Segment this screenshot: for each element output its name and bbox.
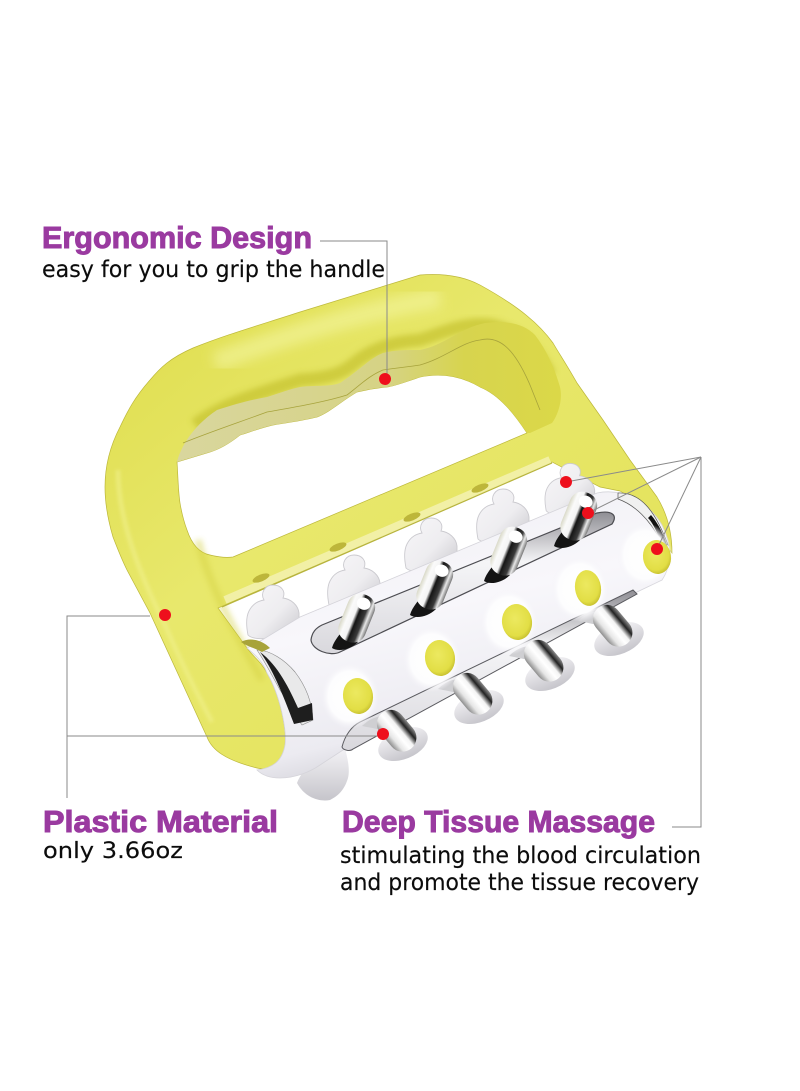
- crossbar highlight: [225, 460, 550, 600]
- yellow dots on roller: [341, 538, 673, 716]
- grip seam line: [183, 339, 540, 443]
- grip upper shadow: [195, 324, 550, 425]
- heading: Ergonomic Design: Ergonomic Design: [42, 220, 312, 255]
- text: grip description: easy for you to grip the handle: [42, 257, 385, 283]
- right chrome end cap: [618, 493, 668, 545]
- left arm shading: [118, 470, 212, 722]
- red marker dots: [159, 373, 663, 740]
- upper chrome spikes: [332, 488, 601, 650]
- grip highlight: [215, 298, 440, 362]
- grip underside band: [177, 322, 561, 462]
- heading: Plastic Material: Plastic Material: [43, 804, 278, 839]
- raised white bumps: [321, 523, 673, 729]
- lower chrome slot: [342, 590, 637, 750]
- roller bottom knob: [297, 748, 349, 800]
- left chrome end cap: [257, 650, 313, 725]
- upper chrome slot: [311, 512, 614, 654]
- text: massage description line 1: stimulating the blood circulation: [340, 843, 701, 869]
- back row white knobs: [247, 463, 595, 639]
- lower chrome spikes: [362, 599, 649, 768]
- heading: Deep Tissue Massage: Deep Tissue Massage: [342, 804, 655, 839]
- crossbar notches: [251, 481, 490, 585]
- text: weight: only 3.66oz: [43, 839, 183, 864]
- text: massage description line 2: and promote the tissue recovery: [340, 870, 699, 896]
- handle: yellow grip frame: [105, 274, 672, 769]
- callout lines: [67, 241, 701, 827]
- roller body: [241, 492, 671, 778]
